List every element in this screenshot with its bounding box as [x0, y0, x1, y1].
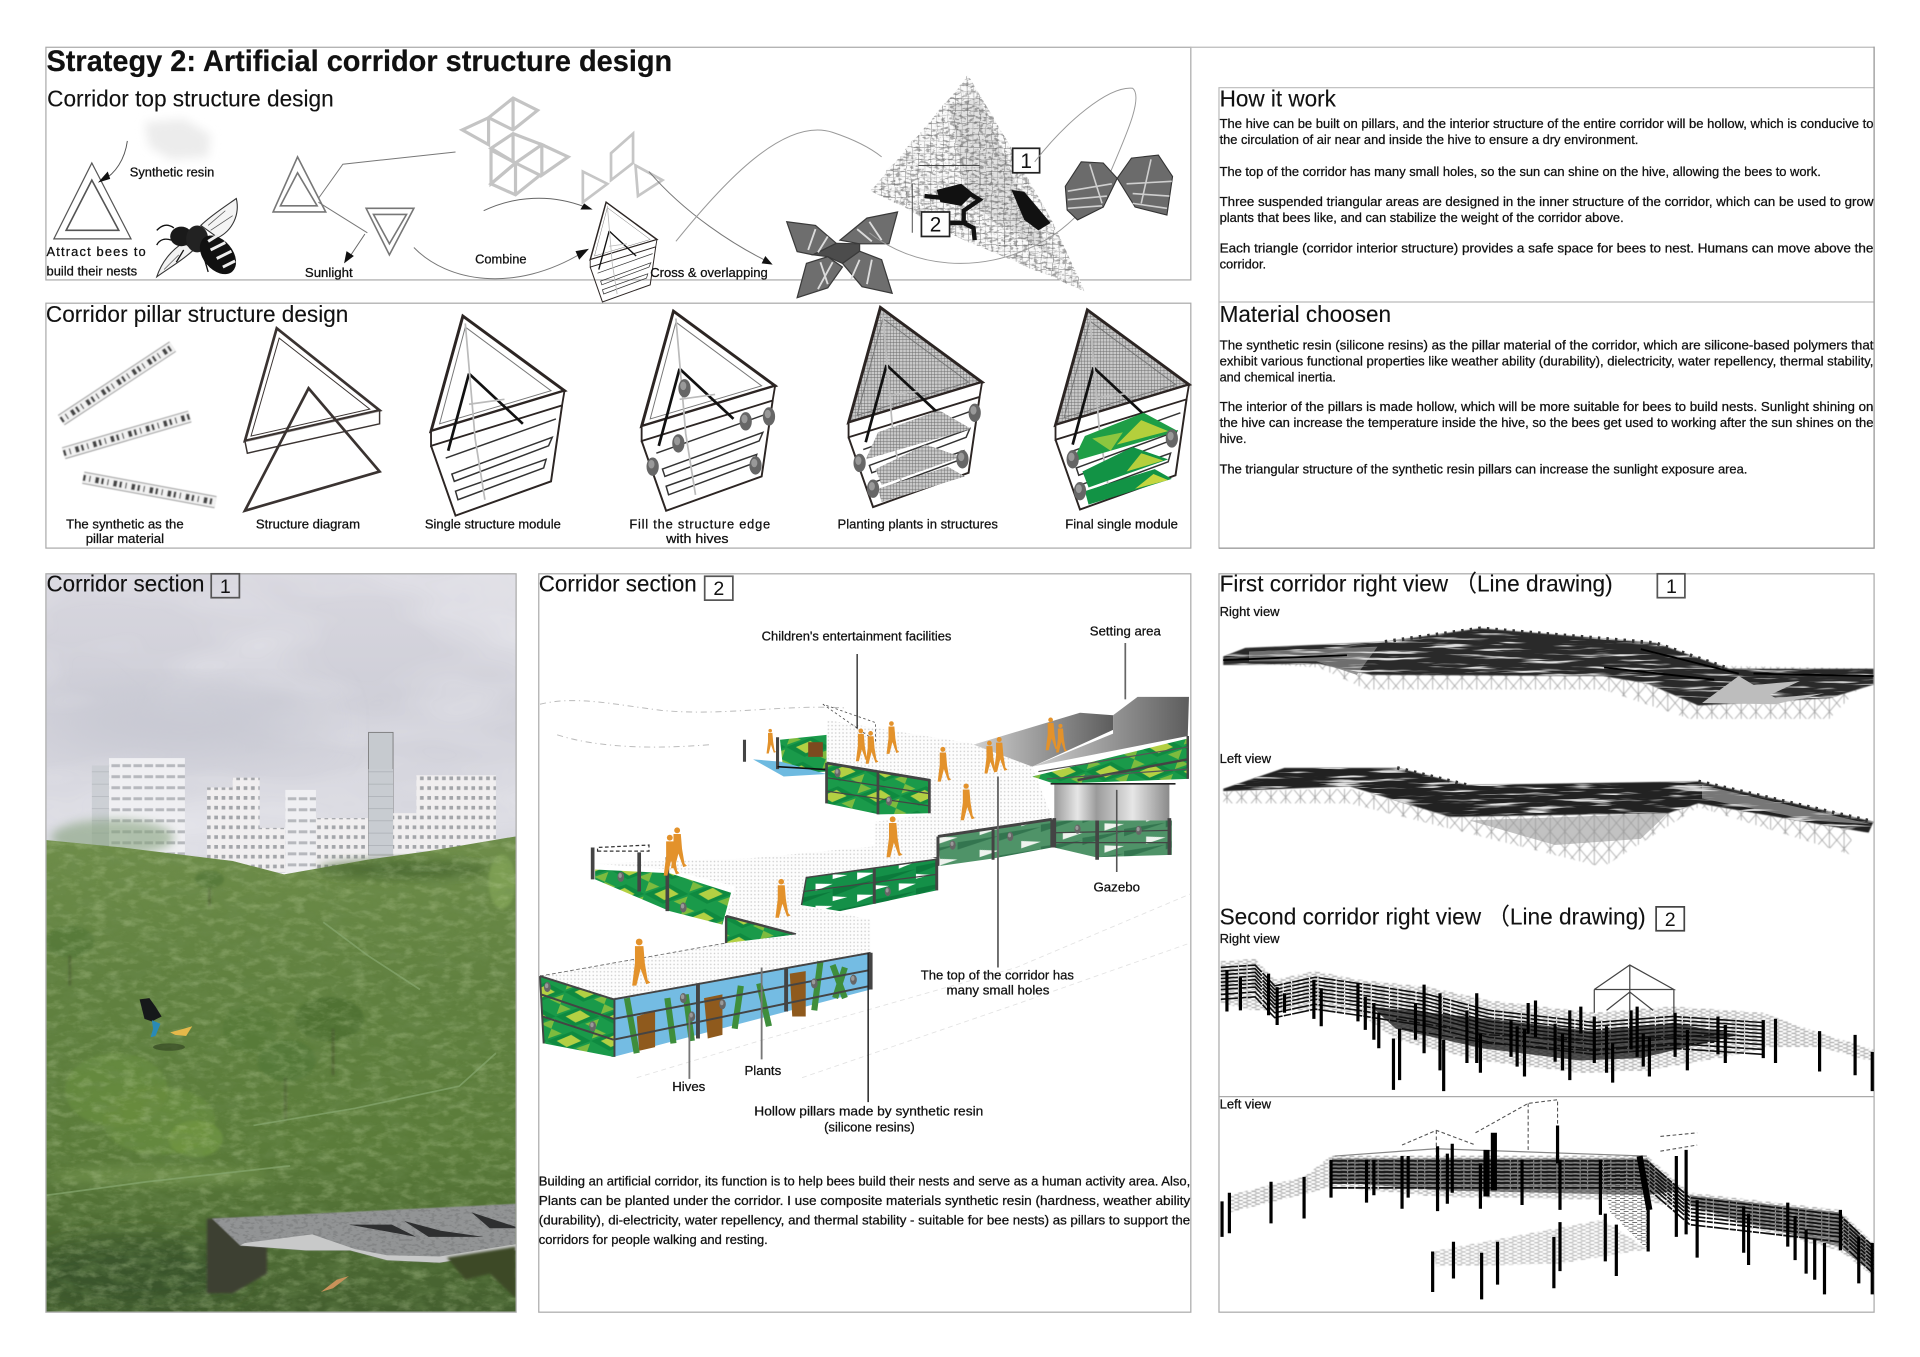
text: material: exhibit various functional properties like weather ability (durability), dielectricity, water repellency, thermal stability,: [1220, 354, 1873, 369]
label: attract bees: [47, 244, 146, 279]
drawing: second corridor right view: [1221, 959, 1873, 1091]
text: material: The interior of the pillars is made hollow, which will be more suitable for bees to build nests. Sunlight shining on: [1220, 399, 1873, 414]
arrow: combine: [414, 247, 589, 279]
label: sunlight: Sunlight: [305, 265, 353, 280]
text: corridor description: corridors for people walking and resting.: [539, 1232, 768, 1247]
label: plants: Plants: [744, 1063, 781, 1078]
text: how it work: Three suspended triangular areas are designed in the inner structure of the corridor, which can be used to grow: [1220, 194, 1874, 209]
curves to marker: [869, 88, 1136, 263]
panel: corridor section 1: [24, 571, 520, 1312]
sky: [47, 573, 516, 873]
middle planters dark: [801, 819, 1052, 911]
marker 2: 2: [930, 214, 941, 237]
label: synthetic as pillar: [66, 516, 184, 546]
panel: line drawings: [1219, 571, 1874, 1312]
heading: corridor pillar: Corridor pillar structure design: [46, 301, 348, 327]
label: small holes: The top of the corridor has: [921, 968, 1074, 983]
label: hollow pillars: [754, 1104, 983, 1135]
heading: corridor section 1: Corridor section: [47, 571, 204, 597]
leader: hollow pillars: [867, 953, 869, 1102]
panel: how it works and material: [1190, 47, 1874, 548]
small triangles: [583, 134, 662, 202]
side facade: [540, 976, 613, 1057]
heading: first corridor: First corridor right view （Line drawing): [1220, 571, 1613, 597]
arrow: to module: [484, 198, 593, 211]
icon: triangle unit: [273, 157, 326, 212]
heading: corridor section 2: Corridor section: [539, 571, 697, 597]
concrete corridor: [207, 1204, 520, 1298]
connector lines: [318, 152, 456, 233]
footpaths: [47, 922, 496, 1195]
drawing: second corridor left view: [1222, 1100, 1873, 1299]
upper walkway surface: [827, 720, 1052, 858]
text: corridor description: Building an artificial corridor, its function is to help bees build their nests and serve as a human activity area. Also,: [539, 1173, 1190, 1188]
marker 2: [921, 212, 950, 237]
leader: children's facilities: [856, 654, 858, 729]
label: synthetic as pillar: The synthetic as the: [66, 517, 184, 532]
corridor drawing: [540, 697, 1190, 1078]
label: structure diagram: Structure diagram: [256, 517, 360, 532]
leader: plants: [761, 967, 763, 1059]
label: hives: Hives: [672, 1079, 705, 1094]
person and dog: [140, 998, 192, 1051]
icon: bee: [157, 198, 243, 281]
module: combined: [590, 202, 657, 302]
text: how it work: The hive can be built on pillars, and the interior structure of the entire corridor will be hollow, which is conducive to: [1220, 116, 1873, 131]
label: children's facilities: Children's entertainment facilities: [762, 629, 951, 644]
text: material: the hive can increase the temperature inside the hive, so the bees get used to working after the sun shines on the: [1220, 415, 1873, 430]
text: how it work: corridor.: [1220, 256, 1266, 271]
module: final: [1056, 310, 1189, 510]
upper right planter: [1032, 736, 1188, 784]
panel: corridor section 2: [539, 571, 1191, 1312]
label: fill with hives: [629, 516, 770, 546]
arrow: resin to triangle: [98, 141, 127, 183]
label: fill with hives: with hives: [665, 531, 729, 546]
dashed outline top: [540, 701, 845, 747]
left green planter: [593, 845, 796, 945]
heading: second corridor: Second corridor right view （Line drawing): [1220, 904, 1646, 930]
label: right view: Right view: [1220, 604, 1280, 619]
label: combine: Combine: [475, 251, 527, 266]
label: planting: Planting plants in structures: [838, 517, 998, 532]
curve: [676, 130, 882, 241]
heading: corridor top: Corridor top structure design: [47, 86, 334, 112]
text: how it work: The top of the corridor has many small holes, so the sun can shine on the hive, allowing the bees to work.: [1220, 164, 1821, 179]
marker 2: 2: [1665, 909, 1676, 931]
label: cross and overlapping: Cross & overlapping: [650, 265, 768, 280]
text: corridor description: Plants can be planted under the corridor. I use composite materials synthetic resin (hardness, weather ability: [539, 1193, 1191, 1208]
gazebo: [1051, 784, 1176, 821]
text: corridor description: (durability), di-electricity, water repellency, and thermal stability - suitable for bee nests) as pillars to support the: [539, 1213, 1190, 1228]
roof: [973, 697, 1189, 767]
grass texture light: [47, 836, 516, 1312]
hives: [544, 825, 1142, 1031]
icon: resin triangle: [54, 163, 131, 239]
label: left view: Left view: [1220, 1096, 1272, 1111]
text: material: hive.: [1220, 431, 1247, 446]
middle walkway: [591, 846, 937, 953]
leader: hives: [688, 1016, 690, 1079]
heading: how it work: How it work: [1220, 86, 1336, 112]
grass texture dark: [47, 836, 516, 1312]
text: how it work: [1220, 116, 1874, 271]
module: planting: [849, 307, 982, 507]
text: material: and chemical inertia.: [1220, 370, 1336, 385]
faint ground lines: [637, 894, 1190, 1078]
upper green planter: [827, 763, 929, 814]
label: gazebo: Gazebo: [1093, 880, 1140, 895]
panel: corridor top structure design: [46, 45, 1191, 302]
leader: gazebo: [1116, 790, 1118, 872]
text: corridor description: [539, 1173, 1191, 1247]
black path 2: [924, 192, 980, 240]
text: material: The triangular structure of the synthetic resin pillars can increase the sunlight exposure area.: [1220, 461, 1747, 476]
pillar material bars: [61, 347, 216, 502]
marker 1: 1: [1666, 576, 1677, 598]
text: how it work: plants that bees like, and can stabilize the weight of the corridor above.: [1220, 210, 1624, 225]
icon: crossed modules: [787, 212, 898, 298]
lower gazebo planter: [1054, 818, 1172, 860]
arrow: cross: [649, 172, 773, 265]
text: how it work: Each triangle (corridor interior structure) provides a safe space for bees to nest. Humans can move above the: [1220, 240, 1873, 255]
structure diagram: [245, 328, 380, 511]
panel: corridor pillar structure design: [46, 301, 1191, 548]
label: hollow pillars: (silicone resins): [824, 1120, 915, 1135]
text: material: [1220, 338, 1874, 476]
label: single module: Single structure module: [425, 517, 561, 532]
module: single structure: [431, 316, 564, 516]
marker 2: 2: [713, 578, 724, 600]
far left segment: [744, 735, 882, 776]
grass shading: [24, 860, 490, 1308]
trees: [45, 855, 516, 1157]
frame: [46, 574, 516, 1312]
drawing: first corridor right view: [1223, 628, 1873, 719]
marker 1: [1013, 148, 1040, 173]
text: how it work: the circulation of air near and inside the hive to ensure a dry environment.: [1220, 132, 1638, 147]
label: fill with hives: Fill the structure edge: [629, 517, 770, 532]
label: right view: Right view: [1220, 931, 1280, 946]
text: material: The synthetic resin (silicone resins) as the pillar material of the corridor, which are silicone-based polymers that: [1220, 338, 1874, 353]
photo: hillside view: [24, 573, 520, 1312]
label: final module: Final single module: [1065, 517, 1178, 532]
icon: butterfly module: [1065, 155, 1173, 220]
label: small holes: [921, 968, 1074, 997]
marker 2: [705, 576, 733, 600]
hillside: [47, 836, 516, 1312]
leader: small holes: [997, 776, 999, 967]
title: Strategy 2: Artificial corridor structure design: [47, 45, 672, 78]
skyline buildings: [51, 732, 496, 873]
icon: inverted triangle: [366, 208, 414, 255]
label: attract bees: build their nests: [47, 264, 137, 279]
people: [632, 718, 1067, 986]
module: hives: [642, 311, 775, 511]
label: synthetic as pillar: pillar material: [86, 531, 164, 546]
label: synthetic resin: Synthetic resin: [130, 164, 214, 179]
label: small holes: many small holes: [947, 982, 1049, 997]
black path 1: [1011, 190, 1051, 230]
arrow: sunlight: [344, 234, 365, 263]
mesh triangle: [871, 76, 1085, 292]
label: attract bees: Attract bees to: [47, 244, 146, 259]
label: hollow pillars: Hollow pillars made by synthetic resin: [754, 1104, 983, 1119]
texture: synthetic resin: [144, 119, 211, 159]
marker 1: [1657, 574, 1685, 598]
marker 2: [1656, 907, 1684, 931]
front facade: [613, 953, 871, 1057]
marker 1: [211, 574, 239, 598]
drawing: first corridor left view: [1223, 768, 1873, 867]
marker 1: 1: [1020, 150, 1032, 173]
marker 1: 1: [220, 576, 231, 598]
label: left view: Left view: [1220, 751, 1272, 766]
lower walkway surface: [540, 934, 871, 999]
label: setting area: Setting area: [1090, 624, 1162, 639]
leader: setting area: [1124, 643, 1126, 699]
heading: material choosen: Material choosen: [1220, 301, 1391, 327]
lattice cluster: [462, 98, 568, 195]
